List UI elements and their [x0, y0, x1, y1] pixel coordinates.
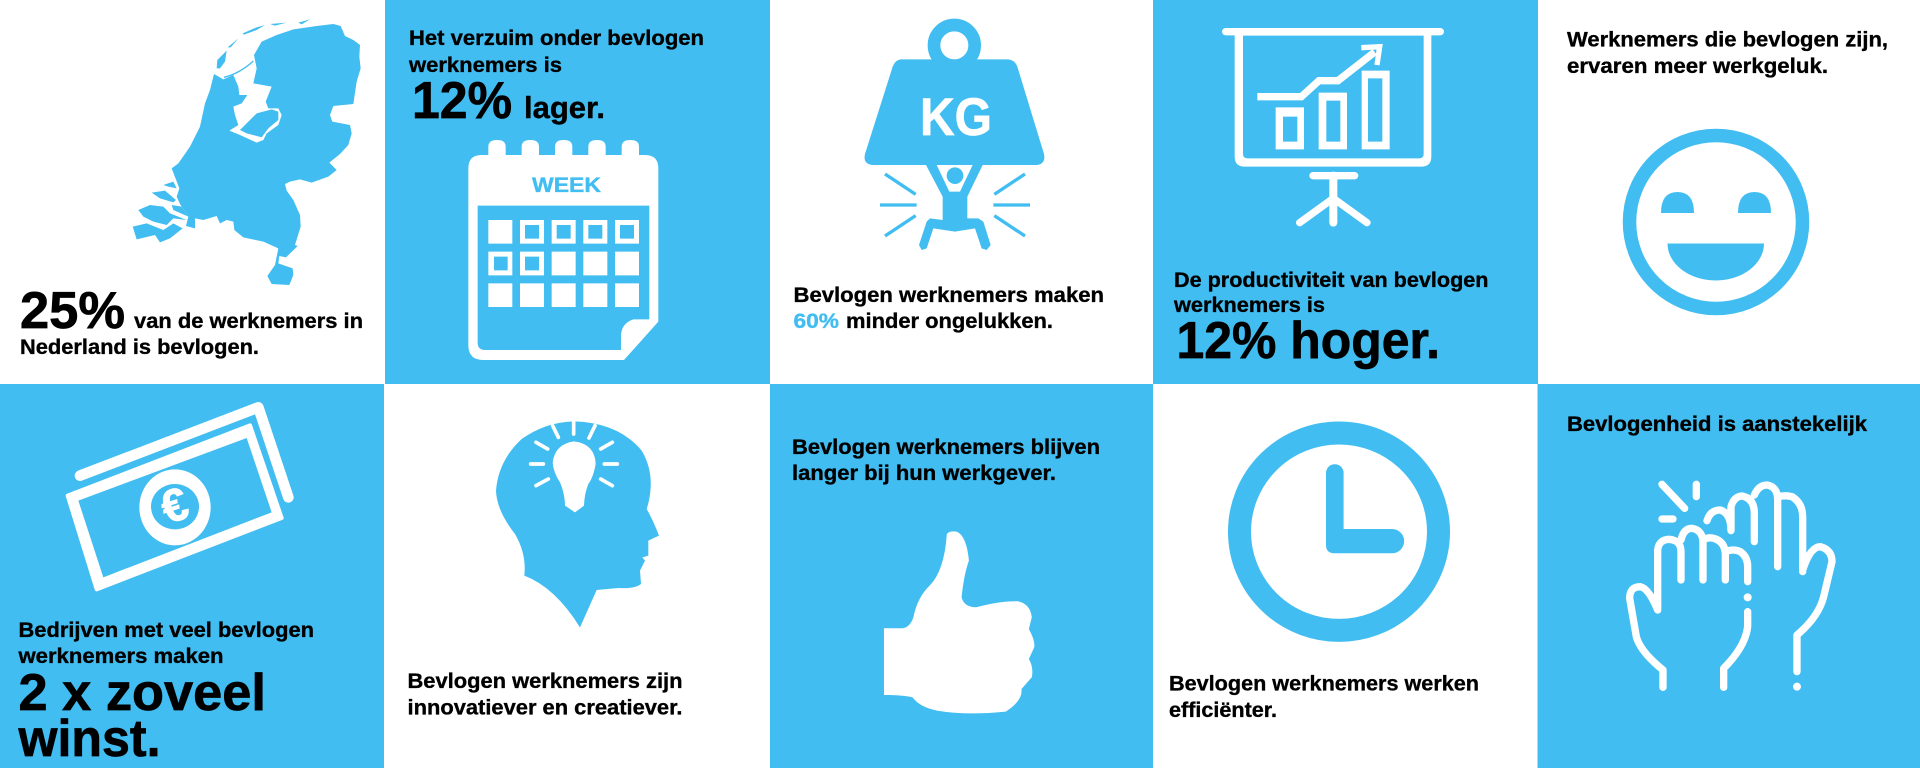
text: De productiviteit van bevlogen werknemers is 12% hoger: 12% hoger.	[1176, 312, 1440, 370]
text: Bevlogen werknemers blijven langer bij hun werkgever	[792, 436, 1100, 485]
text: 25% van de werknemers in Nederland is bevlogen: 25%	[20, 282, 125, 340]
panel: 25% van de werknemers	[0, 0, 385, 384]
symbol: euro sign on coin: €	[154, 476, 195, 534]
icon: high five hands	[1630, 484, 1832, 691]
panel: innovatiever en creatiever	[384, 384, 770, 768]
text: De productiviteit van bevlogen werknemers is 12% hoger: werknemers is	[1173, 294, 1325, 317]
text: De productiviteit van bevlogen werknemers is 12% hoger: De productiviteit van bevlogen	[1174, 269, 1488, 292]
text: Het verzuim onder bevlogen werknemers is 12% lager: lager.	[524, 90, 605, 125]
icon: laughing smiley	[1630, 136, 1802, 308]
text: Bevlogenheid is aanstekelijk: Bevlogenheid is aanstekelijk	[1567, 413, 1867, 436]
text: De productiviteit van bevlogen werknemers is 12% hoger	[1173, 269, 1488, 370]
text: Bevlogen werknemers werken efficiënter: efficiënter.	[1169, 699, 1277, 722]
text: Bevlogen werknemers werken efficiënter: Bevlogen werknemers werken	[1169, 672, 1479, 696]
text: 25% van de werknemers in Nederland is bevlogen: van de werknemers in	[134, 310, 363, 333]
icon: person lifting kg weight	[865, 25, 1044, 250]
text: Werknemers die bevlogen zijn, ervaren meer werkgeluk: Werknemers die bevlogen zijn,	[1567, 28, 1888, 52]
text: Bevlogen werknemers zijn innovatiever en creatiever: Bevlogen werknemers zijn	[408, 670, 682, 693]
label: KG on weight: KG	[920, 88, 992, 147]
text: Bevlogen werknemers maken 60% minder ongelukken: Bevlogen werknemers maken	[794, 284, 1104, 307]
panel: 12% hogere productiviteit	[1153, 0, 1538, 384]
icon: banknotes with euro coin	[68, 407, 288, 589]
text: Bedrijven met veel bevlogen werknemers maken 2 x zoveel winst: werknemers maken	[17, 645, 223, 668]
text: Werknemers die bevlogen zijn, ervaren meer werkgeluk	[1567, 28, 1888, 78]
text: Het verzuim onder bevlogen werknemers is 12% lager: werknemers is	[408, 54, 562, 77]
text: Bedrijven met veel bevlogen werknemers maken 2 x zoveel winst: 2 x zoveel	[18, 664, 266, 722]
icon: calendar	[468, 140, 658, 360]
icon: clock	[1240, 433, 1438, 630]
text: Bevlogen werknemers zijn innovatiever en creatiever: innovatiever en creatiever.	[408, 696, 682, 720]
icon: thumbs up	[884, 531, 1034, 713]
panel: meer werkgeluk	[1538, 0, 1920, 384]
panel: 2 x zoveel winst	[0, 384, 384, 768]
icon: presentation screen with rising chart	[1226, 32, 1440, 223]
panel: langer bij hun werkgever	[770, 384, 1153, 768]
icon: head with light bulb	[496, 421, 659, 627]
panel: bevlogenheid is aanstekelijk	[1538, 384, 1920, 768]
text: Bevlogen werknemers zijn innovatiever en creatiever	[408, 670, 682, 720]
panel: 12% lager verzuim	[385, 0, 770, 384]
text: Bedrijven met veel bevlogen werknemers maken 2 x zoveel winst: Bedrijven met veel bevlogen	[18, 619, 314, 642]
text: Het verzuim onder bevlogen werknemers is 12% lager: Het verzuim onder bevlogen	[409, 27, 704, 50]
text: Het verzuim onder bevlogen werknemers is 12% lager: 12%	[412, 72, 512, 130]
text: 25% van de werknemers in Nederland is bevlogen: Nederland is bevlogen.	[20, 336, 259, 359]
icon: map of the Netherlands	[133, 19, 361, 285]
panel: 60% minder ongelukken	[770, 0, 1153, 384]
text: Bevlogen werknemers blijven langer bij hun werkgever: langer bij hun werkgever.	[792, 462, 1056, 485]
text: Werknemers die bevlogen zijn, ervaren meer werkgeluk: ervaren meer werkgeluk.	[1567, 55, 1828, 78]
text: Het verzuim onder bevlogen werknemers is 12% lager	[408, 27, 704, 130]
text: Bedrijven met veel bevlogen werknemers maken 2 x zoveel winst	[17, 619, 314, 768]
text: Bevlogen werknemers werken efficiënter	[1169, 672, 1479, 722]
text: 25% van de werknemers in Nederland is bevlogen	[20, 282, 363, 359]
text: Bedrijven met veel bevlogen werknemers maken 2 x zoveel winst: winst.	[18, 710, 160, 768]
text: Bevlogen werknemers blijven langer bij hun werkgever: Bevlogen werknemers blijven	[792, 436, 1100, 459]
panel: efficiënter	[1153, 384, 1538, 768]
label: WEEK on calendar: WEEK	[532, 174, 601, 197]
text: Bevlogen werknemers maken 60% minder ongelukken: minder ongelukken.	[846, 310, 1053, 333]
text: Bevlogen werknemers maken 60% minder ongelukken	[794, 284, 1104, 333]
text: Bevlogen werknemers maken 60% minder ongelukken: 60%	[794, 310, 839, 333]
